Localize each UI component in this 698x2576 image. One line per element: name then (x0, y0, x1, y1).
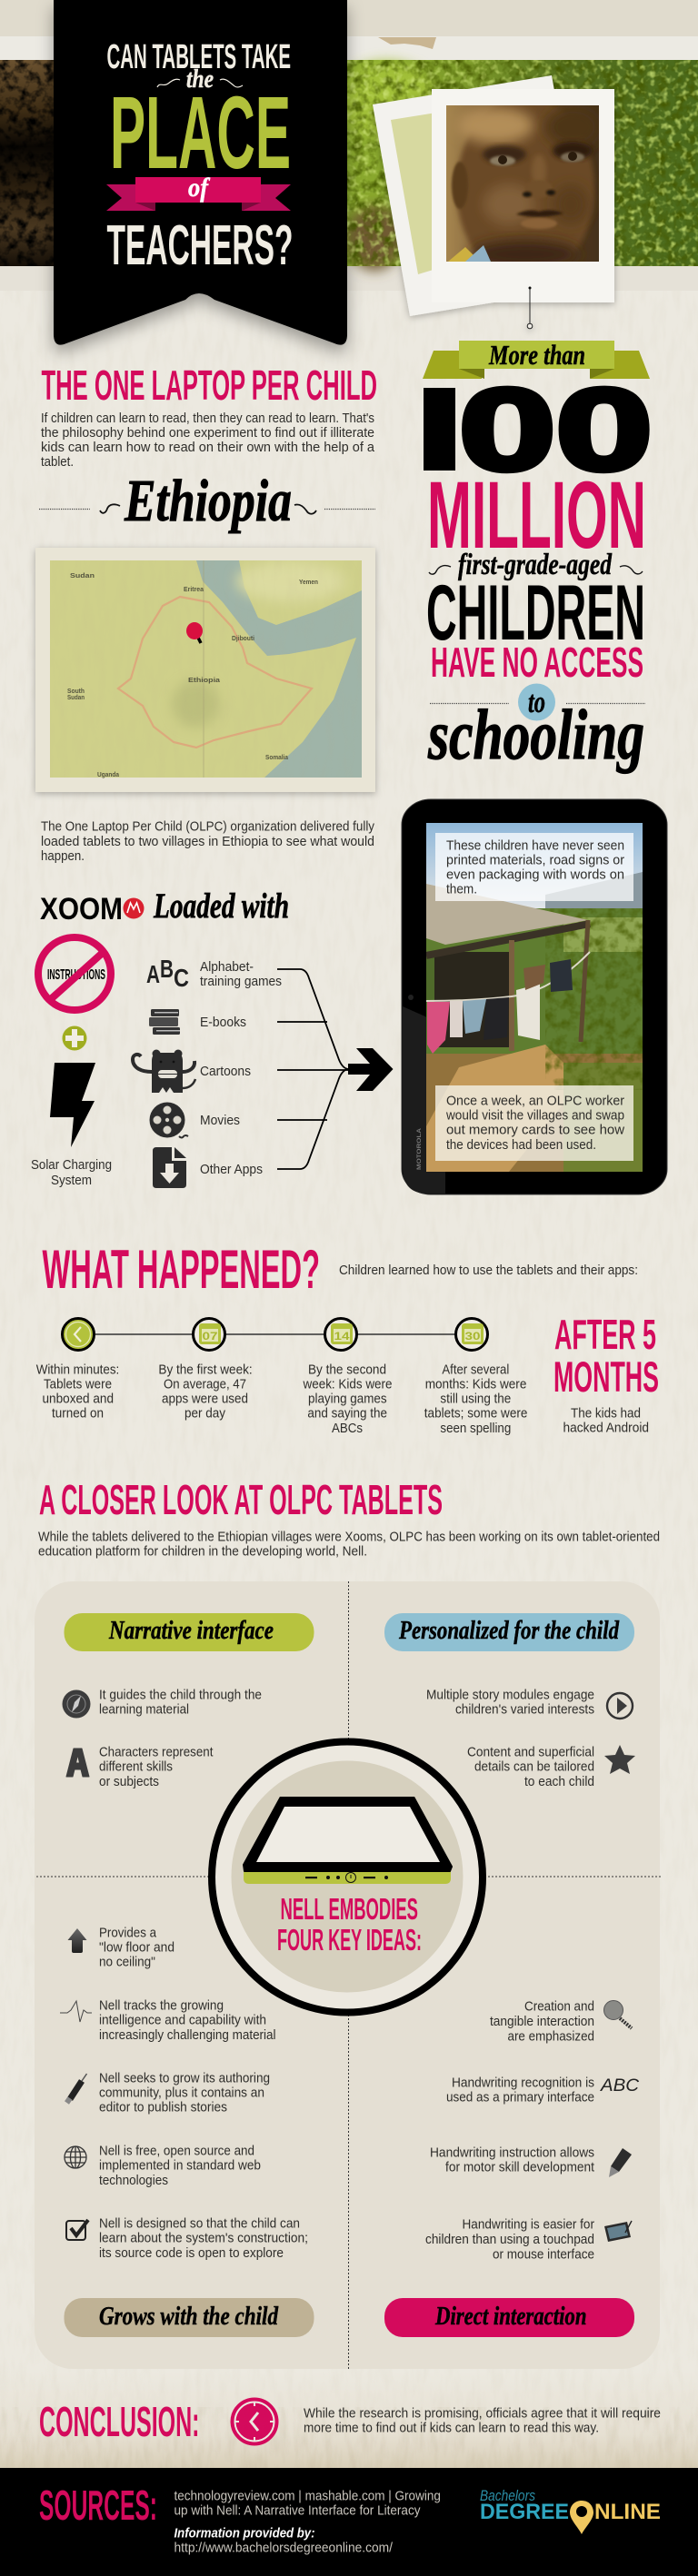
icon: calendar 07: 07 (202, 1330, 218, 1342)
item: characters: different skills (99, 1760, 173, 1775)
intro paragraph: kids can learn how to read on their own with the help of a (41, 441, 375, 455)
app list (133, 955, 282, 1188)
map labels: South (67, 687, 85, 695)
timeline step 3 (303, 1362, 393, 1436)
icon: ABC (146, 955, 189, 992)
callout: never seen printed materials (435, 833, 633, 901)
icon: Nell tablet (244, 1798, 452, 1884)
item: authoring community: editor to publish stories (99, 2100, 227, 2115)
icon: pen (609, 2148, 632, 2177)
label: solar charging system: Solar Charging (31, 1158, 112, 1173)
timeline step 2: per day (184, 1406, 226, 1421)
circle heading (277, 1892, 422, 1957)
closer look paragraph: education platform for children in the developing world, Nell. (38, 1544, 367, 1559)
logo: bachelors degree online: NLINE (594, 2500, 661, 2524)
icon: calendar 30 (456, 1319, 487, 1350)
after 5 months callout (553, 1311, 659, 1435)
item: source code: learn about the system's construction; (99, 2231, 308, 2245)
green banner: More than: More than (488, 339, 585, 371)
label: cartoons: Cartoons (200, 1065, 251, 1079)
icon: calendar 30: 30 (465, 1330, 481, 1342)
timeline step 2: By the first week: (158, 1362, 253, 1377)
icon: compass (62, 1689, 91, 1719)
item: motor skills: for motor skill development (445, 2160, 594, 2175)
first-grade-aged: first-grade-aged (458, 549, 612, 581)
callout: never seen printed materials: printed materials, road signs or (446, 854, 624, 868)
item: low floor: no ceiling" (99, 1955, 155, 1969)
item: story modules (426, 1688, 633, 1719)
polaroid photos (373, 75, 614, 329)
OLPC paragraph: loaded tablets to two villages in Ethiopia to see what would (41, 835, 374, 849)
item: open source: Nell is free, open source and (99, 2144, 254, 2158)
icon: magnifier (603, 2000, 632, 2028)
central circle (212, 1742, 483, 2013)
item: tailored content: Content and superficial (467, 1746, 594, 1760)
callout: never seen printed materials: These children have never seen (446, 839, 624, 854)
item: open source (65, 2144, 261, 2188)
connector lines (277, 969, 348, 1169)
sources text: Information provided by: (174, 2527, 315, 2541)
map labels (67, 571, 318, 778)
callout: never seen printed materials: them. (446, 883, 477, 897)
title line 1: CAN TABLETS TAKE (107, 38, 291, 76)
pin line (527, 287, 533, 329)
timeline step 1: unboxed and (42, 1392, 114, 1406)
item: tangible interaction: Creation and (524, 2000, 594, 2015)
green banner: More than (423, 339, 650, 379)
item: characters: Characters represent (99, 1746, 213, 1760)
item: authoring community (67, 2071, 270, 2115)
after 5 months callout: The kids had (571, 1406, 641, 1421)
item: tailored content: details can be tailored (474, 1760, 594, 1775)
timeline step 2: apps were used (162, 1392, 248, 1406)
timeline step 3: By the second (308, 1362, 386, 1377)
sources text: technologyreview.com | mashable.com | Growing (174, 2489, 441, 2503)
pink ribbon: of (106, 173, 291, 211)
timeline step 4: months: Kids were (425, 1377, 526, 1392)
panel: Nell four key ideas (35, 1581, 662, 2369)
icon: ABC: C (174, 964, 189, 992)
item: tracks intelligence (60, 1998, 276, 2043)
icon: star (604, 1745, 635, 1774)
item: tangible interaction: are emphasized (507, 2029, 594, 2044)
item: open source: technologies (99, 2174, 168, 2188)
item: touchpad: Handwriting is easier for (462, 2218, 594, 2233)
number 100 (424, 365, 653, 495)
pill: personalized for the child: Personalized for the child (398, 1617, 620, 1645)
back polaroid (373, 75, 589, 316)
item: guides the child (62, 1688, 262, 1719)
callout: never seen printed materials: even packaging with words on (446, 868, 624, 883)
item: characters (66, 1746, 213, 1789)
label: other apps: Other Apps (200, 1163, 263, 1177)
header band with photo strip (0, 0, 698, 291)
number 100: 1 (425, 370, 454, 491)
icon: map pin (186, 622, 203, 643)
tablet with village photo (402, 799, 667, 1194)
OLPC paragraph: happen. (41, 849, 85, 864)
pink ribbon: of: of (188, 173, 211, 203)
item: handwriting recognition (446, 2076, 639, 2105)
icon: books (149, 1009, 180, 1035)
icon: no instructions: INSTRUCTIONS (47, 967, 105, 983)
item: touchpad: or mouse interface (493, 2247, 594, 2262)
icon: film reel (149, 1103, 188, 1137)
icon: ABC: B (160, 955, 174, 983)
logo: bachelors degree online: Bachelors (480, 2487, 535, 2504)
timeline step 3: ABCs (332, 1422, 363, 1436)
icon: lightning bolt (50, 1063, 95, 1147)
icon: handwritten ABC: ABC (600, 2076, 639, 2095)
pill: narrative interface (64, 1613, 314, 1651)
sources text (174, 2489, 441, 2556)
circle heading: NELL EMBODIES (280, 1892, 418, 1926)
pill: grows with the child (64, 2298, 314, 2337)
timeline step 2 (158, 1362, 253, 1421)
map labels: Uganda (97, 770, 120, 778)
to badge (430, 683, 645, 721)
timeline step 4: seen spelling (440, 1422, 511, 1436)
logo: bachelors degree online: DEGREE (480, 2500, 569, 2524)
what happened intro: Children learned how to use the tablets and their apps: (339, 1263, 638, 1278)
timeline (62, 1319, 487, 1350)
item: low floor (67, 1926, 174, 1969)
item: source code: Nell is designed so that the child can (99, 2216, 300, 2231)
item: source code: its source code is open to explore (99, 2246, 284, 2261)
item: tracks intelligence: intelligence and capability with (99, 2013, 266, 2027)
big statistic column (424, 365, 653, 774)
item: low floor: "low floor and (99, 1940, 174, 1955)
front polaroid with child portrait (432, 89, 614, 302)
item: guides the child: learning material (99, 1702, 189, 1717)
heading: the one laptop per child: THE ONE LAPTOP PER CHILD (42, 362, 377, 409)
number 100: 00 (459, 365, 653, 495)
item: characters: or subjects (99, 1775, 159, 1789)
timeline step 1: Within minutes: (36, 1362, 119, 1377)
label: alphabet-training games: Alphabet- (200, 960, 254, 975)
heading: Xoom loaded with: XOOM (40, 892, 123, 926)
pill: narrative interface: Narrative interface (108, 1617, 274, 1645)
item: tracks intelligence: increasingly challenging material (99, 2028, 276, 2043)
logo: bachelors degree online (480, 2487, 661, 2534)
label: e-books: E-books (200, 1016, 246, 1030)
item: touchpad (425, 2218, 632, 2262)
icon: calendar 07 (193, 1319, 225, 1350)
callout: weekly OLPC worker visit (435, 1085, 633, 1161)
conclusion text (304, 2407, 661, 2436)
sources text: http://www.bachelorsdegreeonline.com/ (174, 2541, 394, 2556)
timeline step 3: and saying the (307, 1406, 387, 1421)
title ribbon (54, 0, 347, 345)
pill: direct interaction (384, 2298, 634, 2337)
footer (0, 2468, 698, 2576)
intro paragraph: the philosophy behind one experiment to find out if illiterate (41, 426, 374, 441)
item: story modules: Multiple story modules engage (426, 1688, 594, 1702)
callout: weekly OLPC worker visit: Once a week, an OLPC worker (446, 1094, 624, 1108)
map labels: Yemen (299, 578, 318, 586)
title word: PLACE: PLACE (110, 75, 291, 190)
pill: personalized for the child (384, 1613, 634, 1651)
map labels: Ethiopia (188, 676, 221, 684)
icon: cartoon monster (133, 1050, 195, 1093)
intro paragraph (41, 411, 375, 470)
icon: no instructions (38, 937, 111, 1010)
item: tracks intelligence: Nell tracks the growing (99, 1998, 224, 2013)
map labels: Somalia (265, 753, 289, 761)
timeline step 4: still using the (440, 1392, 511, 1406)
map labels: Sudan (70, 571, 95, 580)
icon: play (607, 1693, 633, 1719)
tablet brand label: MOTOROLA (416, 1128, 423, 1170)
icon: drawing tablet (604, 2221, 632, 2242)
timeline step 1: Tablets were (44, 1377, 112, 1392)
heading: Xoom loaded with: Loaded with (153, 887, 289, 926)
map of Ethiopia (35, 548, 375, 792)
heading: sources: SOURCES: (39, 2482, 157, 2529)
intro paragraph: If children can learn to read, then they can read to learn. That's (41, 411, 374, 426)
item: handwriting recognition: used as a primary interface (446, 2091, 594, 2105)
icon: file download (153, 1147, 186, 1188)
tablet screen photo (426, 823, 643, 1172)
conclusion text: more time to find out if kids can learn to read this way. (304, 2422, 599, 2436)
pill: grows with the child: Grows with the child (99, 2302, 278, 2331)
pill: direct interaction: Direct interaction (434, 2302, 587, 2331)
label: movies: Movies (200, 1114, 240, 1128)
to badge: to (528, 686, 545, 719)
item: low floor: Provides a (99, 1926, 157, 1940)
OLPC paragraph: The One Laptop Per Child (OLPC) organization delivered fully (41, 819, 375, 834)
conclusion text: While the research is promising, officials agree that it will require (304, 2407, 661, 2422)
heading: Xoom loaded with (40, 887, 289, 926)
icon: pencil (67, 2074, 87, 2103)
item: tangible interaction: tangible interaction (490, 2015, 594, 2029)
item: story modules: children's varied interests (455, 1702, 594, 1717)
icon: up arrow (67, 1928, 87, 1953)
title word: the: the (186, 65, 214, 94)
heading: conclusion: CONCLUSION: (39, 2398, 200, 2445)
closer look paragraph (38, 1530, 660, 1559)
item: source code (66, 2216, 308, 2261)
title word: TEACHERS?: TEACHERS? (107, 214, 293, 277)
icon: plus (62, 1026, 87, 1050)
item: motor skills (430, 2145, 632, 2177)
item: authoring community: community, plus it contains an (99, 2086, 264, 2100)
item: tailored content (467, 1745, 635, 1789)
timeline step 3: week: Kids were (303, 1377, 393, 1392)
item: handwriting recognition: Handwriting recognition is (452, 2076, 594, 2091)
item: tangible interaction (490, 2000, 632, 2044)
after 5 months callout: hacked Android (563, 1421, 649, 1435)
icon: ABC: A (146, 960, 160, 988)
arrow (348, 1048, 393, 1091)
item: motor skills: Handwriting instruction allows (430, 2145, 594, 2160)
item: touchpad: children than using a touchpad (425, 2233, 594, 2247)
timeline step 3: playing games (308, 1392, 387, 1406)
timeline step 2: On average, 47 (164, 1377, 246, 1392)
icon: globe (65, 2146, 86, 2168)
label: alphabet-training games (200, 960, 282, 989)
closer look paragraph: While the tablets delivered to the Ethiopian villages were Xooms, OLPC has been working on its own tablet-oriented (38, 1530, 660, 1544)
timeline step 4: tablets; some were (424, 1406, 527, 1421)
title word: the (157, 65, 243, 94)
label: solar charging system: System (51, 1174, 92, 1188)
timeline step 4 (424, 1362, 527, 1436)
circle heading: FOUR KEY IDEAS: (277, 1923, 422, 1957)
callout: weekly OLPC worker visit: the devices had been used. (446, 1138, 596, 1153)
icon: motorola logo (124, 897, 144, 919)
callout: weekly OLPC worker visit: would visit the villages and swap (445, 1108, 624, 1123)
label: alphabet-training games: training games (200, 975, 282, 989)
heading: what happened: WHAT HAPPENED? (42, 1239, 320, 1300)
item: authoring community: Nell seeks to grow its authoring (99, 2071, 270, 2086)
label: solar charging system (31, 1158, 112, 1188)
sources text: up with Nell: A Narrative Interface for Literacy (174, 2503, 421, 2518)
timeline step 1 (36, 1362, 119, 1421)
icon: clock (62, 1319, 95, 1350)
map labels: Sudan (67, 693, 85, 701)
heading: Ethiopia: Ethiopia (124, 468, 292, 534)
intro paragraph: tablet. (41, 455, 74, 470)
callout: weekly OLPC worker visit: out memory cards to see how (446, 1123, 625, 1137)
timeline step 4: After several (442, 1362, 509, 1377)
icon: checkbox (66, 2220, 88, 2240)
item: guides the child: It guides the child through the (99, 1688, 262, 1702)
heading: Ethiopia (39, 468, 375, 534)
icon: conclusion clock (232, 2399, 277, 2444)
item: tailored content: to each child (524, 1775, 594, 1789)
timeline step 1: turned on (52, 1406, 104, 1421)
icon: calendar 14 (325, 1319, 356, 1350)
icon: letter A (66, 1749, 89, 1777)
item: open source: implemented in standard web (99, 2158, 261, 2173)
icon: calendar 14: 14 (334, 1330, 350, 1342)
OLPC paragraph (41, 819, 375, 864)
map labels: Djibouti (232, 634, 254, 642)
icon: wave (60, 2001, 92, 2022)
map labels: Eritrea (184, 585, 204, 593)
